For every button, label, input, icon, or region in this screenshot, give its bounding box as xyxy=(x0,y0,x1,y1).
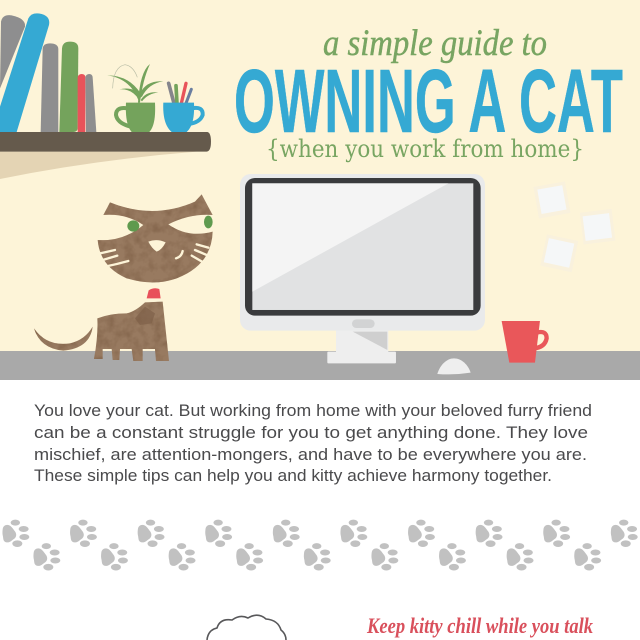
book: upright grey xyxy=(41,43,58,132)
book: leaning grey xyxy=(0,15,25,88)
stand base xyxy=(327,352,396,363)
mouse xyxy=(437,358,471,374)
pot handle xyxy=(116,108,131,127)
title block xyxy=(234,23,623,163)
shelf board xyxy=(0,132,211,152)
paw print divider xyxy=(2,520,638,570)
shelf with books and cups xyxy=(0,13,211,179)
pens xyxy=(169,83,174,103)
monitor casing xyxy=(240,174,485,331)
computer monitor xyxy=(240,174,485,363)
title: when you work from home: {when you work from home} xyxy=(266,135,584,163)
plant leaves xyxy=(107,64,163,103)
cat fur shapes xyxy=(34,194,213,361)
intro paragraph: mischief, are attention-mongers, and have to be everywhere you are. xyxy=(34,446,587,464)
thin dried stems xyxy=(113,65,137,88)
sticky note 3 xyxy=(540,234,578,272)
intro paragraph xyxy=(34,402,592,485)
thought cloud outline xyxy=(207,615,286,640)
title: a simple guide to: a simple guide to xyxy=(323,23,547,64)
plant pot with leaves xyxy=(107,64,163,132)
monitor screen xyxy=(252,183,473,310)
desk xyxy=(0,351,640,380)
cup handle xyxy=(188,108,203,124)
cat collar xyxy=(147,288,161,298)
monitor bezel xyxy=(245,178,481,316)
cup body xyxy=(163,103,194,132)
body patch xyxy=(135,307,155,325)
intro paragraph: These simple tips can help you and kitty achieve harmony together. xyxy=(34,467,552,485)
cat whiskers xyxy=(100,244,208,267)
cat illustration xyxy=(34,194,213,361)
cat right eye xyxy=(204,216,213,228)
cat left eye xyxy=(127,220,139,232)
book: green xyxy=(59,42,78,132)
pot body xyxy=(126,103,155,132)
cat body xyxy=(94,302,169,361)
desk items and sticky notes xyxy=(437,181,615,374)
sticky note 2 xyxy=(580,209,615,244)
intro paragraph: You love your cat. But working from home with your beloved furry friend xyxy=(34,402,592,420)
tip heading: Keep kitty chill while you talk xyxy=(366,613,593,638)
red mug xyxy=(502,321,540,363)
sticky note 1 xyxy=(533,181,570,218)
red mug handle xyxy=(534,332,547,348)
cat tail xyxy=(34,327,93,351)
monitor logo pill xyxy=(352,319,375,328)
header background xyxy=(0,0,640,352)
book: leaning blue xyxy=(0,13,49,132)
cat head xyxy=(98,194,213,282)
pen cup xyxy=(163,83,203,132)
screen highlight xyxy=(252,183,448,292)
monitor stand xyxy=(336,330,388,352)
shelf shadow xyxy=(0,152,197,179)
book: red xyxy=(78,74,85,132)
cat nose xyxy=(148,240,166,252)
book: thin grey xyxy=(85,74,96,132)
intro paragraph: can be a constant struggle for you to get anything done. They love xyxy=(34,424,588,442)
stand shadow xyxy=(353,332,387,350)
